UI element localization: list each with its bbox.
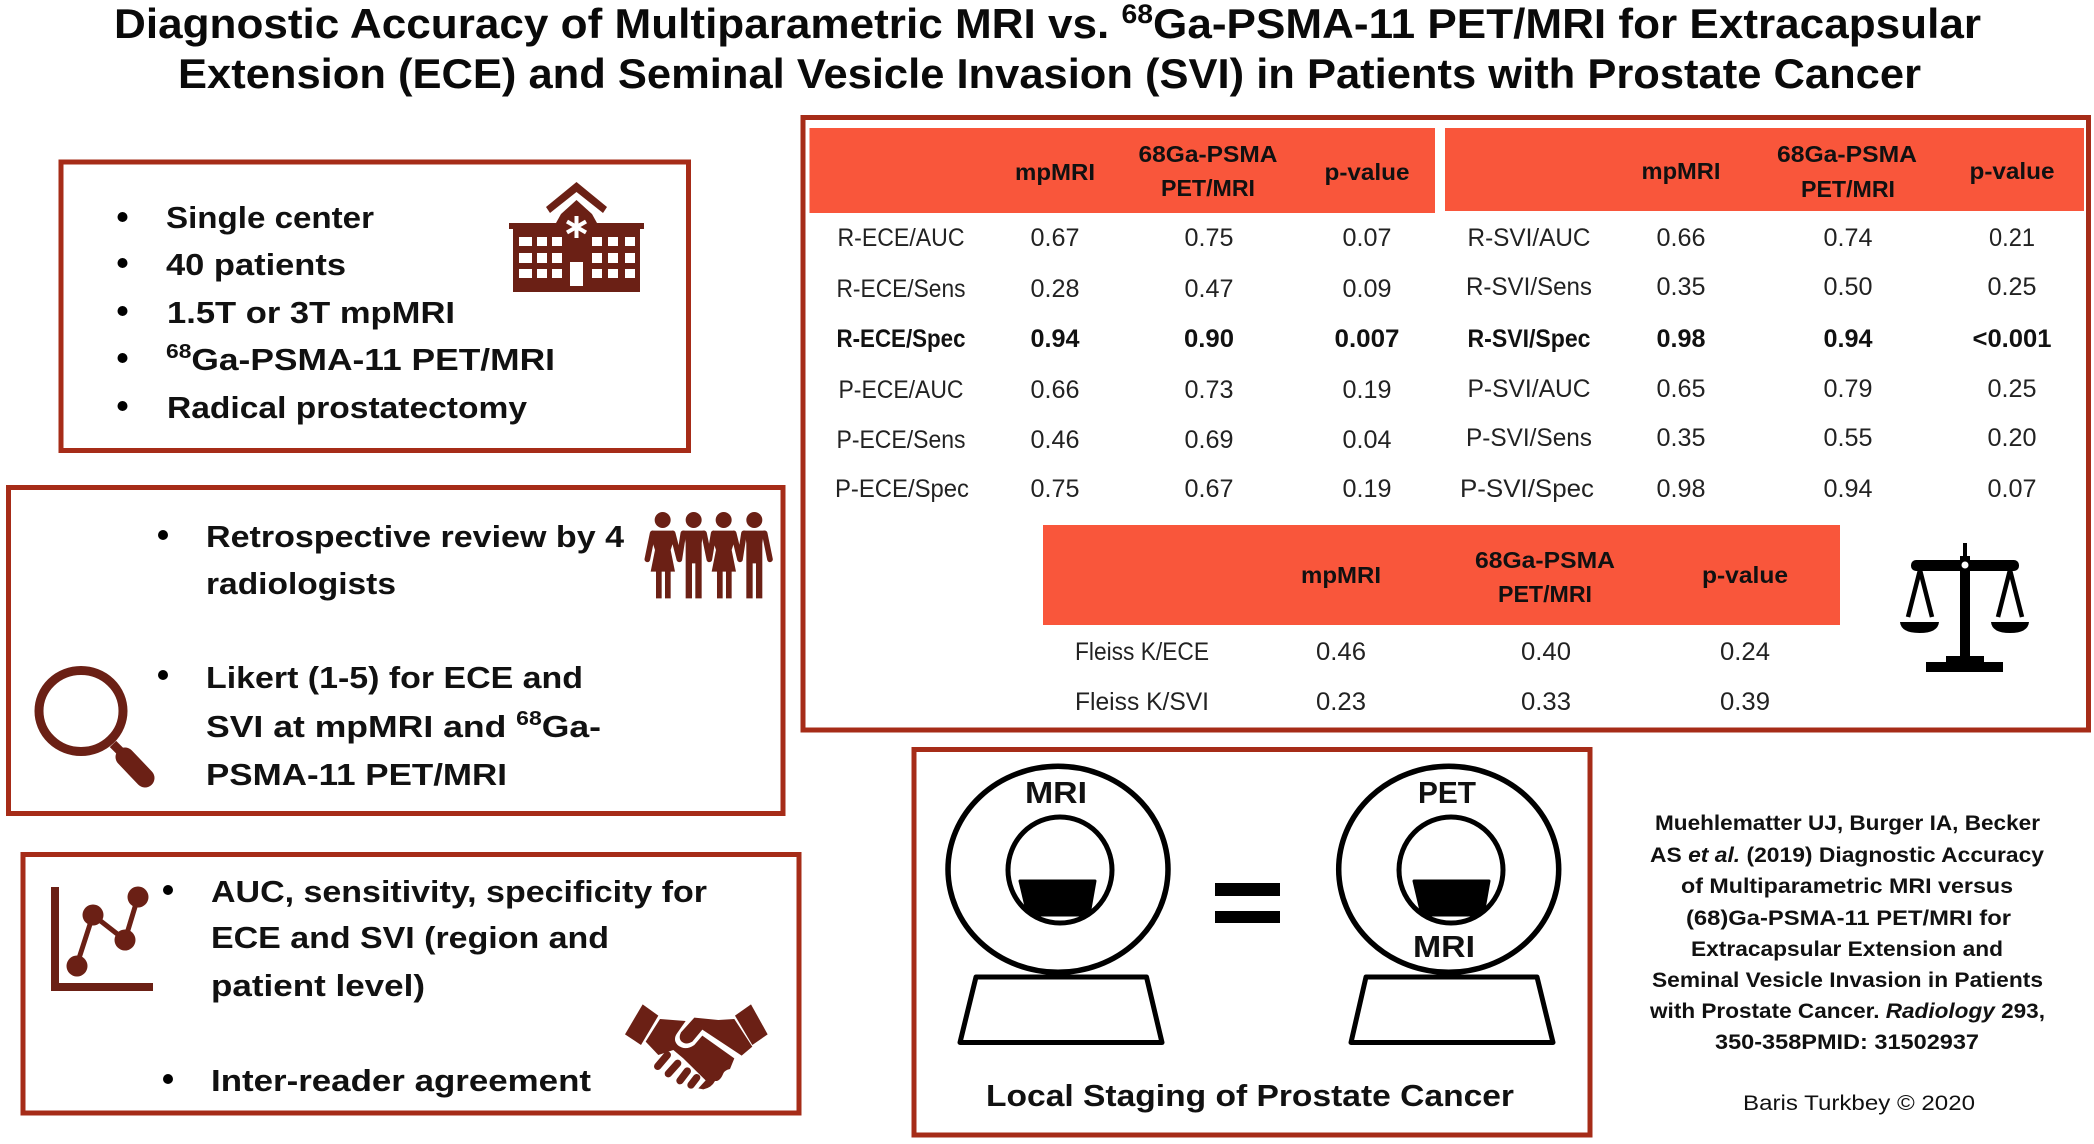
table: ECE results: P-ECE/AUC: [838, 376, 964, 404]
table header: ECE: mpMRI: [1015, 159, 1095, 185]
table: SVI results: 0.94: [1824, 475, 1873, 503]
table: SVI results: <0.001: [1972, 325, 2052, 353]
bullet list: outcome measures: ECE and SVI (region and: [211, 920, 609, 955]
table: ECE results: P-ECE/Spec: [835, 475, 969, 503]
bullet list: review method: PSMA-11 PET/MRI: [206, 757, 507, 792]
table: SVI results: 0.94: [1824, 325, 1873, 353]
citation: Muehlematter UJ, Burger IA, Becker: [1655, 812, 2040, 835]
citation: Extracapsular Extension and: [1691, 938, 2003, 961]
table: Fleiss kappa: 0.39: [1720, 688, 1770, 716]
table header: ECE: p-value: [1324, 159, 1410, 185]
table: SVI results: 0.25: [1988, 375, 2036, 403]
title: [114, 0, 1981, 97]
table: Fleiss kappa: 0.40: [1521, 638, 1571, 666]
table: Fleiss kappa: 0.24: [1720, 638, 1770, 666]
table: SVI results: 0.35: [1656, 424, 1706, 452]
citation: Seminal Vesicle Invasion in Patients: [1652, 969, 2043, 992]
table: SVI results: 0.55: [1824, 424, 1872, 452]
table: ECE results: 0.07: [1342, 224, 1392, 252]
bullet list: review method: Likert (1-5) for ECE and: [206, 660, 583, 695]
icon: PET/MRI scanner: PET: [1418, 775, 1476, 810]
panel: local staging comparison: [914, 750, 1590, 1135]
table: SVI results: 0.79: [1824, 375, 1872, 403]
table header: ECE: PET/MRI: [1161, 175, 1255, 201]
table: Fleiss kappa: [1043, 525, 1840, 716]
table header: SVI: PET/MRI: [1801, 176, 1895, 202]
table: SVI results: R-SVI/Spec: [1468, 325, 1591, 353]
table header: SVI: 68Ga-PSMA: [1777, 141, 1917, 167]
table: ECE results: 0.46: [1030, 426, 1080, 454]
bullet list: review method: SVI at mpMRI and: [206, 709, 468, 744]
title: Diagnostic Accuracy of Multiparametric MRI vs.: [114, 0, 1062, 47]
table header: SVI: mpMRI: [1642, 158, 1720, 184]
bullet list: study population: 68: [166, 341, 191, 363]
table: Fleiss kappa: 0.46: [1316, 638, 1366, 666]
bullet list: outcome measures: patient level): [211, 968, 425, 1003]
table: ECE results: 0.69: [1184, 426, 1234, 454]
table: Fleiss kappa: 0.23: [1316, 688, 1366, 716]
panel: results tables: [803, 118, 2088, 730]
table: ECE results: 0.007: [1334, 325, 1400, 353]
bullet list: study population: [118, 200, 555, 425]
title: Extension (ECE) and Seminal Vesicle Invasion (SVI) in Patients with Prostate Cancer: [178, 50, 1921, 97]
table: ECE results: 0.94: [1030, 325, 1080, 353]
icon: line chart: [51, 886, 153, 991]
table header: Fleiss kappa: [1043, 525, 1840, 625]
table header: Fleiss kappa: p-value: [1702, 562, 1788, 588]
table: ECE results: 0.47: [1184, 275, 1234, 303]
bullet list: review method: radiologists: [206, 566, 396, 601]
table header: ECE: [810, 128, 1435, 213]
table header: Fleiss kappa: mpMRI: [1301, 562, 1381, 588]
table: ECE results: [810, 128, 1435, 503]
table header: Fleiss kappa: 68Ga-PSMA: [1475, 547, 1615, 573]
table: ECE results: 0.66: [1030, 376, 1080, 404]
table: ECE results: 0.67: [1030, 224, 1080, 252]
table: ECE results: 0.75: [1030, 475, 1080, 503]
bullet list: outcome measures: [163, 874, 707, 1098]
table: Fleiss kappa: Fleiss K/SVI: [1075, 688, 1209, 716]
table: SVI results: 0.50: [1824, 273, 1872, 301]
citation: of Multiparametric MRI versus: [1681, 875, 2013, 898]
table header: SVI: [1445, 128, 2084, 211]
bullet list: review method: Retrospective review by 4: [206, 519, 625, 554]
bullet list: review method: 68: [516, 708, 542, 730]
table: SVI results: 0.98: [1656, 475, 1706, 503]
bullet list: study population: 40 patients: [166, 247, 346, 282]
icon: handshake: [625, 1004, 768, 1089]
icon: equals sign: [1215, 883, 1280, 923]
citation: (68)Ga-PSMA-11 PET/MRI for: [1686, 907, 2011, 930]
table: SVI results: 0.21: [1989, 224, 2035, 252]
table: ECE results: 0.09: [1342, 275, 1392, 303]
icon: balance scale: [1900, 543, 2029, 672]
icon: MRI scanner: MRI: [1025, 775, 1087, 810]
caption: local staging: Local Staging of Prostate Cancer: [986, 1078, 1514, 1113]
bullet list: review method: [158, 519, 625, 792]
table: ECE results: 0.90: [1184, 325, 1234, 353]
table: SVI results: R-SVI/AUC: [1468, 224, 1590, 252]
table: SVI results: 0.65: [1656, 375, 1706, 403]
icon: hospital: [509, 182, 644, 292]
table header: Fleiss kappa: PET/MRI: [1498, 581, 1592, 607]
credit: Baris Turkbey © 2020: [1743, 1092, 1975, 1115]
bullet list: study population: Single center: [166, 200, 374, 235]
table: SVI results: 0.98: [1656, 325, 1706, 353]
icon: MRI scanner: [948, 766, 1168, 1042]
bullet list: study population: 1.5T or 3T mpMRI: [167, 295, 455, 330]
table: Fleiss kappa: Fleiss K/ECE: [1075, 638, 1209, 666]
bullet list: outcome measures: AUC, sensitivity, specificity for: [211, 874, 707, 909]
panel: study population: [61, 162, 688, 450]
table: SVI results: P-SVI/AUC: [1468, 375, 1590, 403]
bullet list: review method: Ga-: [542, 709, 601, 744]
table: SVI results: R-SVI/Sens: [1466, 273, 1592, 301]
citation: AS et al. (2019) Diagnostic Accuracy: [1650, 844, 2044, 867]
icon: PET/MRI scanner: MRI: [1413, 929, 1475, 964]
table: ECE results: 0.67: [1184, 475, 1234, 503]
table header: SVI: p-value: [1970, 158, 2054, 184]
table: ECE results: 0.73: [1184, 376, 1234, 404]
title: Ga-PSMA-11 PET/MRI for Extracapsular: [1153, 0, 1981, 47]
table: SVI results: 0.35: [1656, 273, 1706, 301]
table: ECE results: P-ECE/Sens: [836, 426, 966, 454]
icon: magnifying glass: [39, 670, 145, 778]
bullet list: outcome measures: Inter-reader agreement: [211, 1063, 591, 1098]
panel: review method: [8, 488, 783, 814]
icon: four people: [647, 512, 770, 598]
table header: ECE: 68Ga-PSMA: [1138, 141, 1278, 167]
table: Fleiss kappa: 0.33: [1521, 688, 1571, 716]
citation: with Prostate Cancer. Radiology 293,: [1649, 1000, 2045, 1023]
table: ECE results: R-ECE/Spec: [836, 325, 966, 353]
citation: [1649, 812, 2045, 1054]
icon: PET/MRI scanner: [1339, 766, 1559, 1042]
table: SVI results: P-SVI/Sens: [1466, 424, 1592, 452]
citation: 350-358PMID: 31502937: [1715, 1031, 1979, 1054]
table: SVI results: 0.20: [1988, 424, 2036, 452]
table: SVI results: 0.66: [1656, 224, 1706, 252]
table: ECE results: 0.28: [1030, 275, 1080, 303]
table: SVI results: 0.25: [1988, 273, 2036, 301]
table: ECE results: R-ECE/Sens: [836, 275, 966, 303]
table: SVI results: P-SVI/Spec: [1460, 475, 1594, 503]
table: ECE results: 0.19: [1342, 376, 1392, 404]
bullet list: study population: Ga-PSMA-11 PET/MRI: [191, 342, 555, 377]
table: ECE results: 0.04: [1342, 426, 1392, 454]
panel: outcome measures: [23, 854, 799, 1113]
table: ECE results: 0.19: [1342, 475, 1392, 503]
table: SVI results: 0.07: [1988, 475, 2036, 503]
table: ECE results: 0.75: [1184, 224, 1234, 252]
table: ECE results: R-ECE/AUC: [838, 224, 964, 252]
table: SVI results: 0.74: [1824, 224, 1873, 252]
table: SVI results: [1445, 128, 2084, 503]
bullet list: study population: Radical prostatectomy: [167, 390, 528, 425]
